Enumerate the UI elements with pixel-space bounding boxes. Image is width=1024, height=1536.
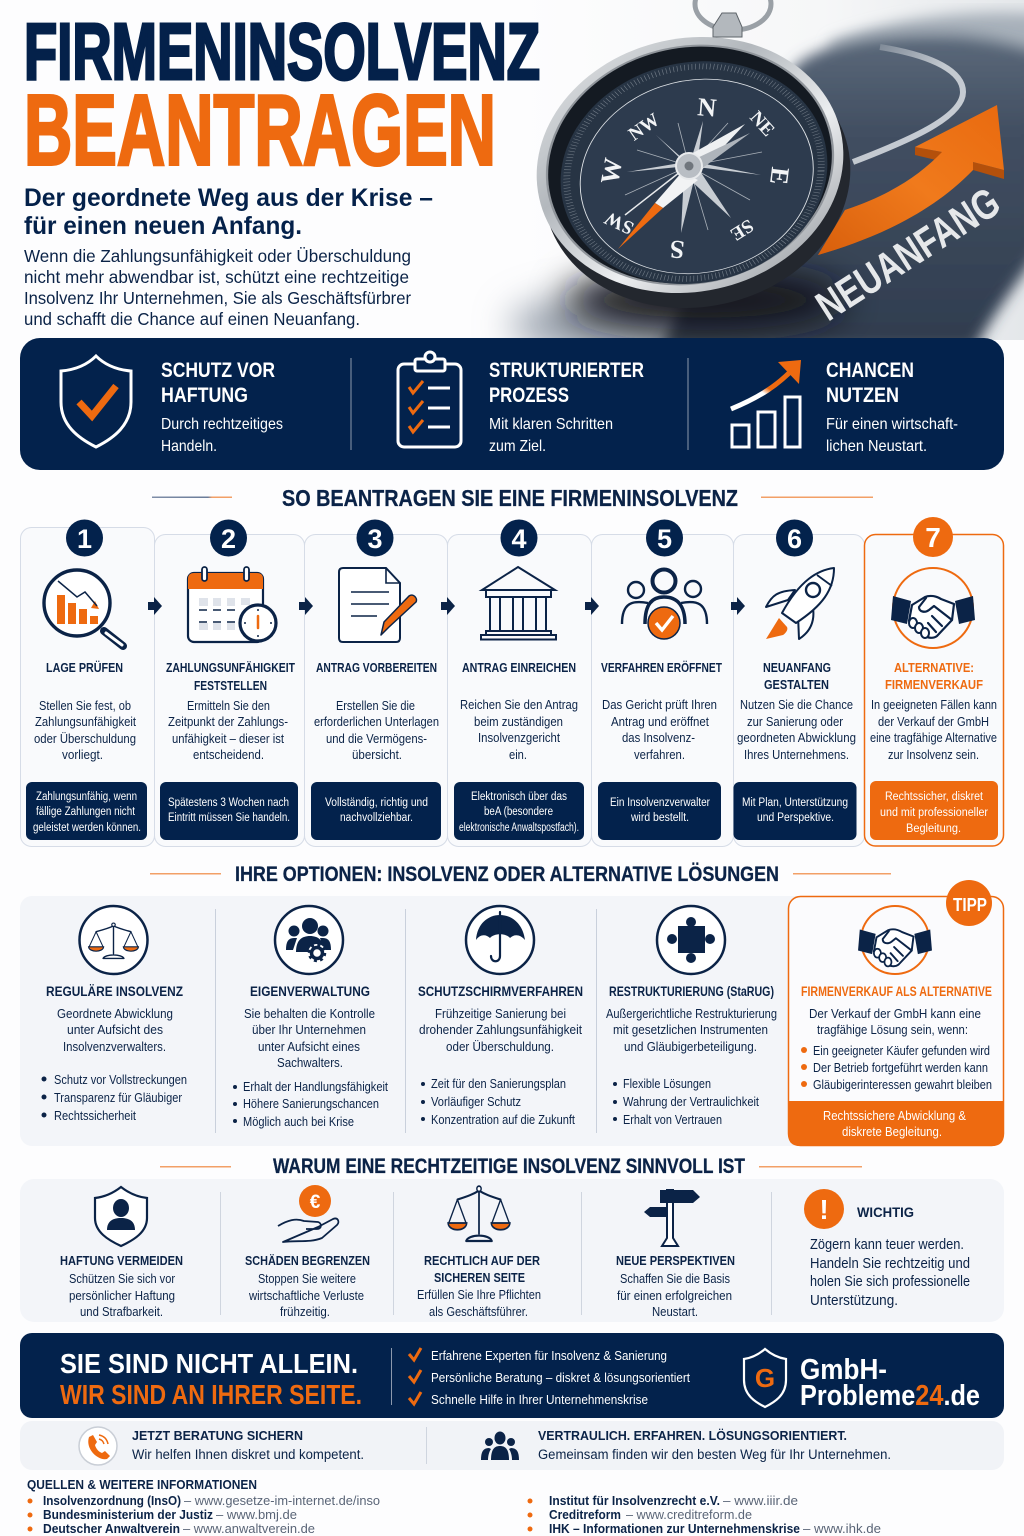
step 7 title: FIRMENVERKAUF (885, 677, 983, 692)
option: self-administration: Höhere Sanierungschancen (243, 1097, 379, 1111)
reason: legally safe: Erfüllen Sie Ihre Pflichten (417, 1288, 541, 1302)
step 6 description: geordneten Abwicklung (737, 730, 856, 745)
panel: call to action (20, 1333, 1004, 1418)
benefits band (20, 338, 1004, 470)
callout: important: Unterstützung. (810, 1293, 898, 1309)
compass letters: E (764, 166, 795, 186)
step 5 note: wird bestellt. (630, 812, 689, 824)
sources: QUELLEN & WEITERE INFORMATIONEN (27, 1478, 257, 1492)
benefit 3 text: NUTZEN (826, 384, 899, 407)
option: restructuring: und Gläubigerbeteiligung. (624, 1039, 757, 1054)
reason: legally safe: als Geschäftsführer. (429, 1305, 528, 1319)
sources: Deutscher Anwaltverein (43, 1522, 180, 1536)
logo: G (755, 1363, 775, 1393)
step numbers: 6 (787, 524, 802, 554)
contact text: JETZT BERATUNG SICHERN (132, 1428, 303, 1443)
heading: reasons: WARUM EINE RECHTZEITIGE INSOLVENZ SINNVOLL IST (273, 1155, 745, 1178)
option: company sale: Der Betrieb fortgeführt werden kann (813, 1061, 988, 1075)
logo (744, 1349, 980, 1412)
sources: – www.gesetze-im-internet.de/inso (184, 1494, 380, 1508)
step 4 note: Elektronisch über das (471, 791, 567, 803)
benefit 3 text: lichen Neustart. (826, 438, 927, 455)
option: restructuring: Wahrung der Vertraulichkeit (623, 1095, 759, 1109)
step 6 title: NEUANFANG (763, 660, 831, 675)
logo: GmbH- (800, 1354, 887, 1386)
reason: limit damage: wirtschaftliche Verluste (248, 1289, 364, 1303)
benefit 2 text (489, 359, 644, 455)
step 5 note: Ein Insolvenzverwalter (610, 797, 710, 809)
benefit 2 text: PROZESS (489, 384, 569, 407)
option: protective shield procedure: Frühzeitige Sanierung bei (435, 1006, 566, 1021)
step 1 description: oder Überschuldung (34, 731, 136, 746)
step 5 description: Das Gericht prüft Ihren (602, 697, 717, 712)
checklist: Persönliche Beratung – diskret & lösungsorientiert (431, 1370, 690, 1385)
step 6 description (737, 697, 856, 762)
icon: puzzle (657, 906, 725, 974)
step 4 description: Insolvenzgericht (478, 730, 560, 745)
icon: calendar (188, 567, 276, 642)
reason: limit damage (245, 1185, 370, 1319)
step 4 description: Reichen Sie den Antrag (460, 697, 578, 712)
reason: new perspectives: Schaffen Sie die Basis (620, 1272, 730, 1286)
icon: document and pen (339, 568, 416, 642)
option: company sale: Ein geeigneter Käufer gefunden wird (813, 1044, 990, 1058)
icon: scales (448, 1186, 510, 1241)
subtitle: Der geordnete Weg aus der Krise – (24, 184, 433, 212)
compass (527, 0, 860, 310)
step 2 title (166, 660, 295, 693)
option: company sale: tragfähige Lösung sein, wenn: (817, 1022, 968, 1037)
step 7 description: eine tragfähige Alternative (870, 730, 997, 745)
compass letters: NE (745, 107, 779, 141)
option: regular insolvency: unter Aufsicht des (67, 1022, 163, 1037)
step 2 note (160, 782, 298, 840)
intro text: Insolvenz Ihr Unternehmen, Sie als Geschäftsfürbrer (24, 288, 411, 308)
sources: Insolvenzordnung (InsO) (43, 1494, 181, 1508)
step 1 note: Zahlungsunfähig, wenn (36, 791, 137, 803)
contact text (132, 1428, 364, 1462)
reason: limit damage: frühzeitig. (280, 1305, 330, 1319)
step 7 note: und mit professioneller (880, 807, 988, 819)
icon: people (481, 1432, 519, 1460)
panel: contact strip (20, 1421, 1004, 1470)
step 5 description: das Insolvenz- (622, 730, 695, 745)
option: protective shield procedure: drohender Zahlungsunfähigkeit (419, 1022, 582, 1037)
option: protective shield procedure: Zeit für den Sanierungsplan (431, 1077, 566, 1091)
step 7 note (870, 781, 998, 840)
callout: important: Zögern kann teuer werden. (810, 1237, 964, 1253)
compass letters: SE (726, 215, 757, 245)
option: company sale: Gläubigerinteressen gewahrt bleiben (813, 1078, 992, 1092)
option: self-administration: Sachwalters. (277, 1055, 343, 1070)
option: regular insolvency: Transparenz für Gläubiger (54, 1091, 182, 1105)
option: regular insolvency: Geordnete Abwicklung (57, 1006, 173, 1021)
compass letters: N (696, 92, 718, 123)
slogan: WIR SIND AN IHRER SEITE. (60, 1379, 362, 1410)
benefit 1 text: HAFTUNG (161, 384, 248, 407)
step 6 description: zur Sanierung oder (747, 714, 844, 729)
step numbers: 2 (221, 524, 236, 554)
option: protective shield procedure: SCHUTZSCHIRMVERFAHREN (418, 984, 583, 999)
step 2 description: Zeitpunkt der Zahlungs- (168, 714, 288, 729)
option: restructuring: mit gesetzlichen Instrumenten (613, 1022, 768, 1037)
reason: new perspectives: NEUE PERSPEKTIVEN (616, 1254, 735, 1268)
assurance text (538, 1428, 891, 1462)
step 7 description: In geeigneten Fällen kann (871, 697, 997, 712)
callout: important: Handeln Sie rechtzeitig und (810, 1256, 970, 1272)
step 7 title (885, 660, 983, 692)
step 4 card (448, 534, 592, 846)
step 4 card: ANTRAG EINREICHEN (462, 660, 576, 675)
sources: – www.creditreform.de (626, 1508, 752, 1522)
step 6 card (734, 534, 864, 846)
step 5 card (592, 534, 734, 846)
option: company sale: Rechtssichere Abwicklung & (823, 1109, 967, 1123)
sources: Creditreform (549, 1508, 621, 1522)
option: protective shield procedure: oder Überschuldung. (446, 1039, 554, 1054)
icon: umbrella (466, 906, 534, 974)
option: restructuring (606, 906, 777, 1127)
option: company sale (788, 880, 1004, 1146)
assurance text: Gemeinsam finden wir den besten Weg für Ihr Unternehmen. (538, 1447, 891, 1462)
benefit 1 text: SCHUTZ VOR (161, 359, 275, 382)
icon: people with check (622, 570, 707, 639)
option: protective shield procedure: Vorläufiger Schutz (431, 1095, 521, 1109)
benefit 3 text (826, 359, 958, 455)
compass letters: S (669, 234, 686, 265)
subtitle (24, 184, 433, 240)
option: regular insolvency: Rechtssicherheit (54, 1109, 136, 1123)
step numbers: 7 (925, 522, 941, 553)
step 4 description: beim zuständigen (474, 714, 563, 729)
reason: limit damage: SCHÄDEN BEGRENZEN (245, 1253, 370, 1268)
compass letters: W (595, 156, 628, 186)
heading: options: IHRE OPTIONEN: INSOLVENZ ODER ALTERNATIVE LÖSUNGEN (235, 863, 779, 886)
reason: new perspectives (616, 1190, 735, 1319)
step 2 description: Ermitteln Sie den (187, 698, 270, 713)
option: regular insolvency: REGULÄRE INSOLVENZ (46, 984, 183, 999)
badge: TIPP: TIPP (953, 895, 987, 915)
step 7 card (864, 534, 1004, 846)
option: company sale: Der Verkauf der GmbH kann eine (809, 1006, 981, 1021)
option: self-administration: Sie behalten die Kontrolle (244, 1006, 375, 1021)
callout: important (804, 1189, 970, 1309)
subtitle: für einen neuen Anfang. (24, 212, 302, 240)
benefit 1 text (161, 359, 283, 455)
step 1 description: Zahlungsunfähigkeit (35, 714, 136, 729)
panel: reasons (20, 1179, 1004, 1322)
intro text: und schafft die Chance auf einen Neuanfang. (24, 309, 360, 329)
option: restructuring: Flexible Lösungen (623, 1077, 711, 1091)
icon: shield with person (95, 1187, 147, 1246)
step arrows (148, 597, 745, 615)
compass letters: NW (625, 109, 664, 145)
step 7 description (870, 697, 997, 762)
sources: – www.anwaltverein.de (183, 1522, 315, 1536)
step 7 note: Rechtssicher, diskret (885, 791, 984, 803)
step 2 note: Eintritt müssen Sie handeln. (168, 812, 290, 824)
step 6 note: und Perspektive. (757, 812, 834, 824)
step 6 description: Ihres Unternehmens. (744, 747, 849, 762)
reason: legally safe: SICHEREN SEITE (434, 1271, 525, 1285)
option: protective shield procedure: Konzentration auf die Zukunft (431, 1113, 575, 1127)
benefit 2 text: Mit klaren Schritten (489, 416, 613, 433)
step 5 card: VERFAHREN ERÖFFNET (601, 660, 722, 675)
title: BEANTRAGEN (24, 74, 496, 186)
sources: – www.iiir.de (723, 1494, 798, 1508)
icon: hand with euro: € (310, 1192, 321, 1213)
step numbers (66, 517, 953, 557)
sources: Bundesministerium der Justiz (43, 1508, 213, 1522)
sources: – www.bmj.de (216, 1508, 297, 1522)
step 1 description: Stellen Sie fest, ob (39, 698, 131, 713)
reason: new perspectives: für einen erfolgreichen (617, 1289, 732, 1303)
step 5 description: verfahren. (634, 747, 685, 762)
step 2 description: entscheidend. (193, 747, 264, 762)
compass letters: SW (601, 207, 637, 238)
option: company sale: diskrete Begleitung. (842, 1125, 942, 1139)
step 3 description: Erstellen Sie die (336, 698, 415, 713)
sources: IHK – Informationen zur Unternehmenskrise (549, 1522, 800, 1536)
step 5 note (598, 782, 721, 840)
icon: phone (79, 1427, 117, 1465)
option: self-administration: unter Aufsicht eines (258, 1039, 360, 1054)
step 7 note: Begleitung. (906, 823, 961, 835)
reason: avoid liability: und Strafbarkeit. (80, 1305, 163, 1319)
step 2 description (168, 698, 288, 762)
intro text (24, 246, 411, 329)
benefit 3 text: CHANCEN (826, 359, 914, 382)
compass letters (600, 98, 789, 258)
step 1 note: fällige Zahlungen nicht (36, 806, 136, 818)
reason: avoid liability: Schützen Sie sich vor (69, 1272, 175, 1286)
step 6 note: Mit Plan, Unterstützung (742, 797, 848, 809)
step 3 description: und die Vermögens- (326, 731, 427, 746)
assurance text: VERTRAULICH. ERFAHREN. LÖSUNGSORIENTIERT. (538, 1428, 847, 1443)
icon: signpost (644, 1190, 700, 1246)
step 6 description: Nutzen Sie die Chance (740, 697, 853, 712)
step 2 title: ZAHLUNGSUNFÄHIGKEIT (166, 660, 295, 675)
step 5 description (602, 697, 717, 762)
step 3 note: nachvollziehbar. (340, 812, 413, 824)
icon: growth chart (731, 360, 801, 447)
option: regular insolvency: Insolvenzverwalters. (63, 1039, 166, 1054)
option: regular insolvency (42, 906, 187, 1123)
panel: steps (20, 517, 1004, 846)
icon: shield (61, 356, 131, 447)
option: restructuring: RESTRUKTURIERUNG (StaRUG) (609, 984, 774, 999)
step 1 description: vorliegt. (62, 747, 103, 762)
step 1 card (20, 528, 154, 846)
option: self-administration (233, 906, 388, 1129)
heading: steps: SO BEANTRAGEN SIE EINE FIRMENINSOLVENZ (282, 485, 738, 511)
step 7 title: ALTERNATIVE: (894, 660, 974, 675)
step 6 title: GESTALTEN (764, 677, 829, 692)
step numbers: 1 (77, 524, 92, 554)
title (24, 7, 540, 186)
callout: important: ! (819, 1194, 829, 1225)
contact text: Wir helfen Ihnen diskret und kompetent. (132, 1447, 364, 1462)
option: restructuring: Erhalt von Vertrauen (623, 1113, 722, 1127)
icon: team with gear (275, 906, 343, 974)
step 4 description: ein. (509, 747, 527, 762)
step 3 note (311, 782, 441, 840)
compass rose (618, 121, 762, 249)
sources (27, 1478, 881, 1536)
step 7 description: zur Insolvenz sein. (888, 747, 979, 762)
step numbers: 3 (367, 524, 383, 554)
step 6 note (734, 782, 856, 840)
step 1 note (26, 782, 147, 840)
option: self-administration: Möglich auch bei Krise (243, 1115, 354, 1129)
badge: TIPP (946, 880, 992, 926)
step 2 title: FESTSTELLEN (194, 678, 267, 693)
benefit 3 text: Für einen wirtschaft- (826, 416, 958, 433)
logo: Probleme24.de (800, 1380, 980, 1412)
step 4 description (460, 697, 578, 762)
step 3 description (314, 698, 439, 762)
icon: court building (481, 567, 556, 640)
reason: avoid liability: persönlicher Haftung (69, 1289, 175, 1303)
reason: limit damage: Stoppen Sie weitere (258, 1272, 356, 1286)
sources: – www.ihk.de (803, 1522, 881, 1536)
step 7 description: der Verkauf der GmbH (878, 714, 989, 729)
orange arrow (818, 105, 1004, 255)
step 1 description (34, 698, 136, 762)
step 3 note: Vollständig, richtig und (325, 797, 428, 809)
step 3 card (304, 534, 448, 846)
icon: magnifier (44, 570, 123, 646)
step 4 note (454, 782, 584, 840)
icon: scales (80, 906, 148, 974)
step 6 title (763, 660, 831, 692)
option: restructuring: Außergerichtliche Restrukturierung (606, 1006, 777, 1021)
option: regular insolvency: Schutz vor Vollstreckungen (54, 1073, 187, 1087)
hero illustration: compass and arrow (510, 0, 1024, 357)
option: protective shield procedure (418, 906, 583, 1127)
step 2 description: unfähigkeit – dieser ist (172, 731, 284, 746)
intro text: Wenn die Zahlungsunfähigkeit oder Überschuldung (24, 246, 411, 266)
checklist: Schnelle Hilfe in Ihrer Unternehmenskrise (431, 1392, 648, 1407)
reason: legally safe (417, 1186, 541, 1319)
step 5 description: Antrag und eröffnet (611, 714, 709, 729)
step 3 card: ANTRAG VORBEREITEN (316, 660, 437, 675)
option: self-administration: über Ihr Unternehmen (252, 1022, 366, 1037)
callout: important: holen Sie sich professionelle (810, 1274, 970, 1290)
benefit 1 text: Handeln. (161, 438, 217, 455)
icon: handshake (858, 906, 932, 974)
icon: rocket (766, 568, 834, 639)
reason: avoid liability: HAFTUNG VERMEIDEN (60, 1254, 183, 1268)
option: self-administration: EIGENVERWALTUNG (250, 984, 370, 999)
callout: important: WICHTIG (857, 1204, 914, 1220)
step 2 note: Spätestens 3 Wochen nach (168, 797, 289, 809)
step numbers: 5 (657, 524, 672, 554)
panel: options (20, 880, 1004, 1146)
benefit 2 text: zum Ziel. (489, 438, 546, 455)
step 4 note: beA (besondere (484, 806, 553, 818)
icon: clipboard (398, 352, 461, 447)
step 1 card: LAGE PRÜFEN (46, 660, 123, 675)
icon: handshake (891, 568, 975, 648)
reason: avoid liability (60, 1187, 183, 1319)
step 3 description: übersicht. (352, 747, 402, 762)
intro text: nicht mehr abwendbar ist, schützt eine rechtzeitige (24, 267, 409, 287)
slogan: SIE SIND NICHT ALLEIN. (60, 1348, 358, 1379)
title: FIRMENINSOLVENZ (24, 7, 540, 96)
option: self-administration: Erhalt der Handlungsfähigkeit (243, 1080, 388, 1094)
benefit 1 text: Durch rechtzeitiges (161, 416, 283, 433)
step 1 note: geleistet werden können. (33, 822, 141, 834)
reason: legally safe: RECHTLICH AUF DER (424, 1254, 540, 1268)
sources: Institut für Insolvenzrecht e.V. (549, 1494, 720, 1508)
benefit 2 text: STRUKTURIERTER (489, 359, 644, 382)
step 2 card (154, 534, 304, 846)
checklist: Erfahrene Experten für Insolvenz & Sanierung (431, 1348, 667, 1363)
step 4 note: elektronische Anwaltspostfach). (459, 822, 579, 834)
checklist (409, 1348, 690, 1407)
step 3 description: erforderlichen Unterlagen (314, 714, 439, 729)
slogan (60, 1348, 362, 1410)
reason: new perspectives: Neustart. (652, 1305, 698, 1319)
step numbers: 4 (511, 524, 527, 554)
